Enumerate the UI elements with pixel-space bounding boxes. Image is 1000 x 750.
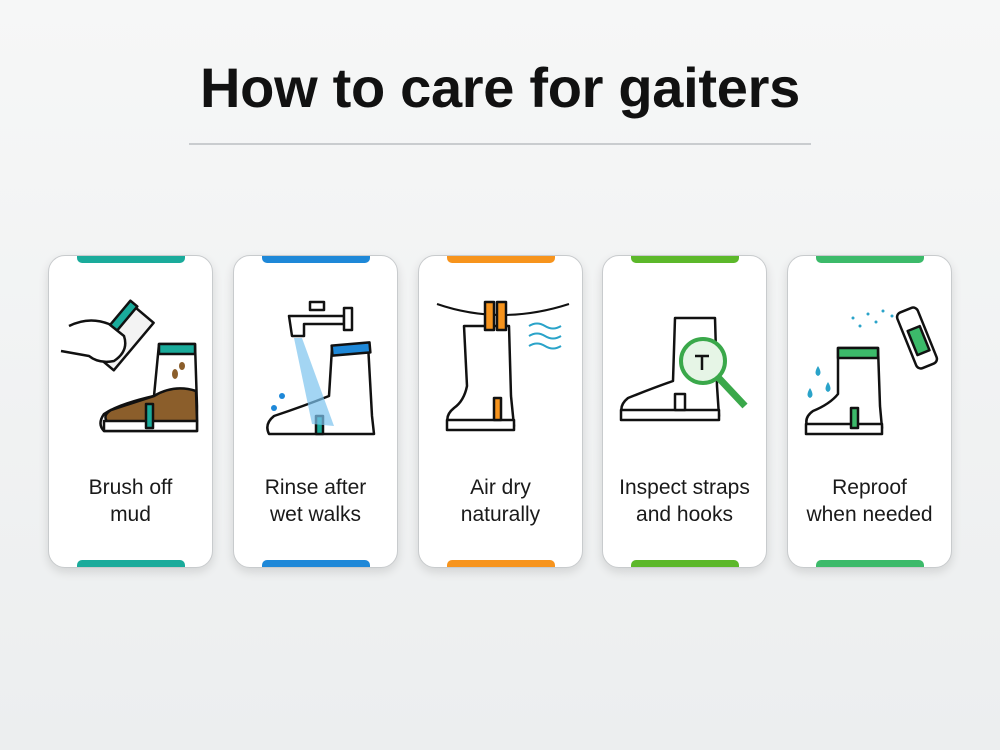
label: Inspect straps [619,476,750,499]
icon: tap and boot [266,300,376,436]
label: Brush off [89,476,172,499]
label: Reproof [832,476,907,499]
icon: brush and muddy boot [60,299,198,432]
icon: boot on line [436,300,570,432]
icon: magnifier and boot [620,316,748,422]
panel: air dry [418,255,583,568]
label [265,476,366,526]
icon: spray and boot [804,306,938,436]
label: wet walks [270,503,361,526]
label [89,476,172,526]
label: when needed [806,503,933,526]
panel: rinse [233,255,398,568]
label: mud [110,503,151,526]
panel: reproof [787,255,952,568]
title: How to care for gaiters [200,56,800,119]
label: Rinse after [265,476,366,499]
label [806,476,933,526]
panel: brush off mud [48,255,213,568]
label: and hooks [636,503,733,526]
panel: inspect [602,255,767,568]
label [619,476,750,526]
label: naturally [461,503,540,526]
label [461,476,540,526]
label: Air dry [470,476,531,499]
